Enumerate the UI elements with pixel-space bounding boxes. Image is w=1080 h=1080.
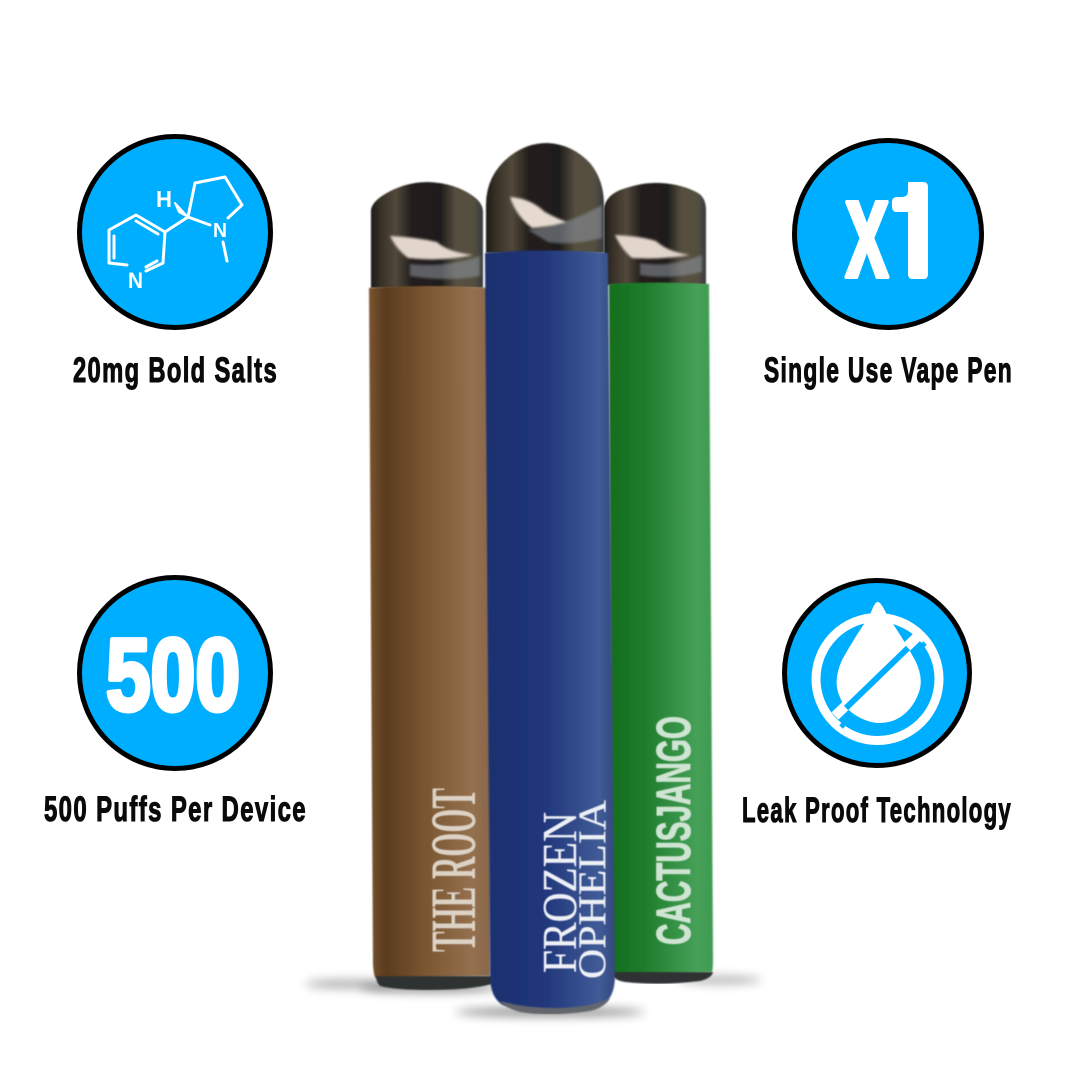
feature: 20mg Bold Salts — [73, 136, 278, 390]
ground shadows — [305, 976, 762, 1016]
icon: nicotine molecule: N — [213, 220, 227, 242]
feature: 500 Puffs Per Device — [44, 578, 307, 829]
vape pen: Cactus Jango (green) — [604, 183, 713, 984]
caption: 500 Puffs Per Device — [44, 790, 307, 829]
vape pen: The Root (brown): THE ROOT — [418, 788, 490, 952]
feature: Single Use Vape Pen — [764, 140, 1013, 390]
label: Cactus Jango: CACTUSJANGO — [648, 716, 701, 945]
badge circle — [80, 578, 270, 768]
icon: x1: 1 — [890, 154, 930, 309]
feature: Leak Proof Technology — [742, 580, 1012, 830]
icon: 500: 500 — [106, 618, 240, 732]
badge circle — [794, 140, 982, 328]
caption: 20mg Bold Salts — [73, 351, 278, 390]
label: Frozen: FROZEN — [532, 812, 587, 973]
vape pen: The Root (brown) — [369, 182, 492, 990]
badge circle — [80, 136, 270, 328]
icon: nicotine molecule: H — [156, 186, 172, 212]
badge circle — [784, 580, 970, 766]
icon: nicotine molecule — [109, 177, 242, 293]
icon: crossed-out drop — [816, 602, 939, 740]
icon: nicotine molecule: N — [128, 268, 143, 293]
vape pen: Frozen Ophelia (blue) — [485, 143, 615, 1014]
icon: x1 — [844, 182, 928, 279]
label: Ophelia: OPHELIA — [571, 800, 614, 979]
icon: x1: x — [845, 149, 889, 308]
